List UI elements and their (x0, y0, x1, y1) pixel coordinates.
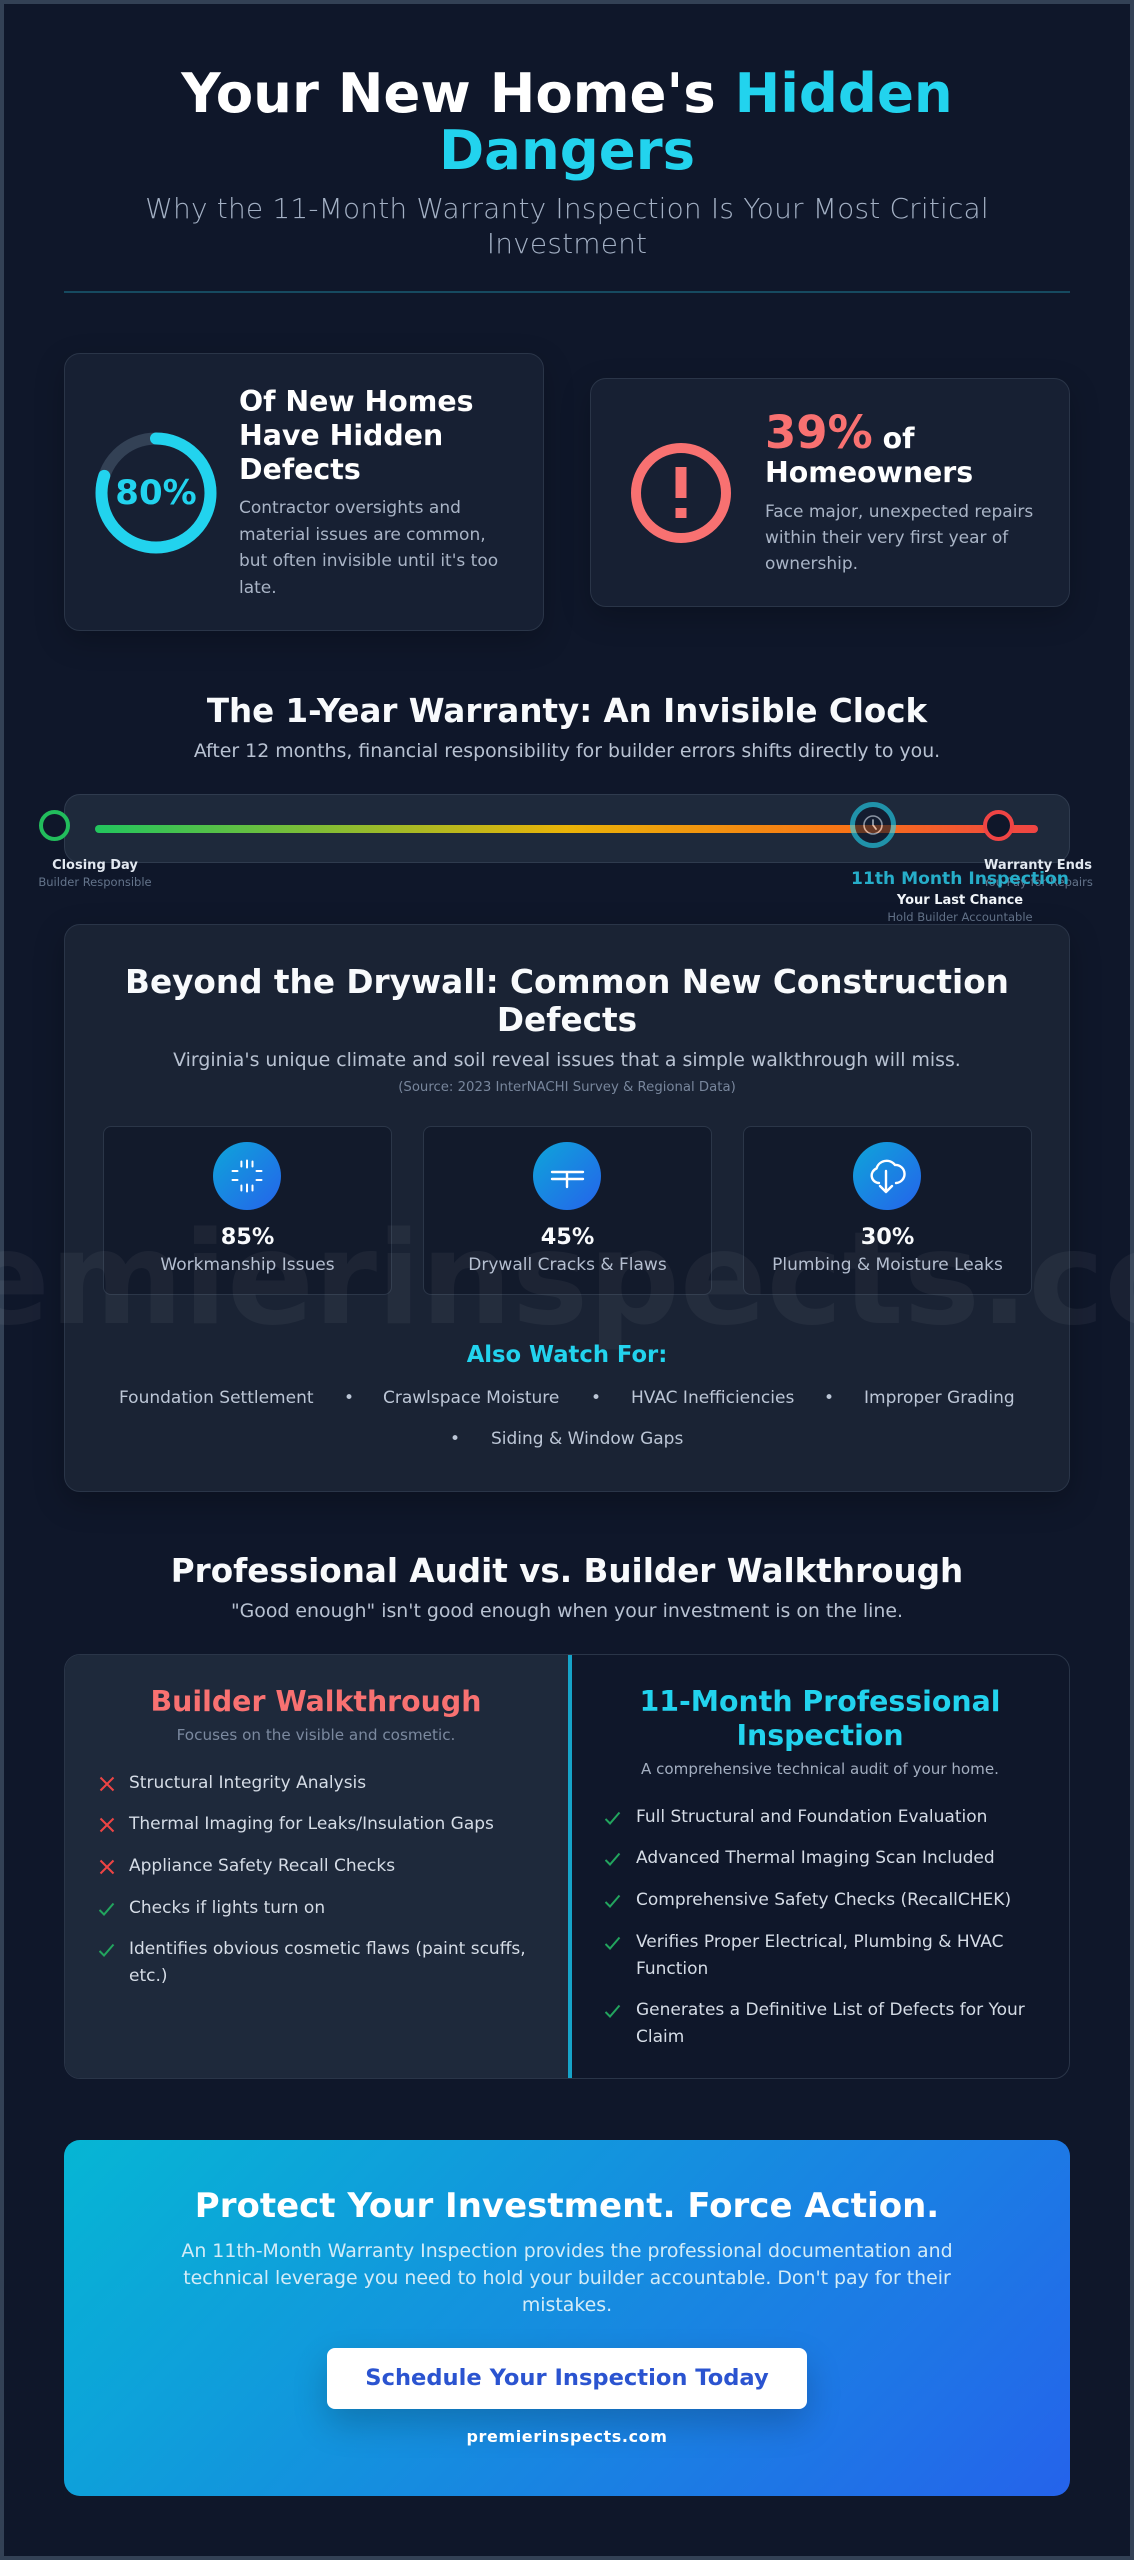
stat value: 45% (541, 1224, 594, 1250)
cta body (181, 2240, 953, 2316)
cta button: Schedule Your Inspection Today (365, 2365, 769, 2391)
panel: comparison (64, 1654, 1070, 2079)
label: 11th month inspection: Your Last Chance (897, 893, 1023, 908)
label: closing day (38, 858, 152, 889)
header (145, 61, 989, 260)
pro title: Inspection (736, 1719, 904, 1752)
also watch for list: HVAC Inefficiencies (631, 1388, 794, 1408)
timeline track panel (64, 794, 1070, 863)
pro title (640, 1685, 1000, 1752)
stat subheading: Homeowners (765, 456, 973, 489)
label: warranty ends: You Pay for Repairs (983, 875, 1093, 889)
card body: late. (239, 578, 277, 598)
title (180, 61, 953, 182)
stat body: Face major, unexpected repairs (765, 502, 1033, 522)
marker: 11th month (850, 802, 896, 848)
pro subtitle: A comprehensive technical audit of your home. (641, 1760, 999, 1778)
subtitle (145, 192, 989, 260)
stat heading: 39% of (765, 406, 914, 459)
also watch for list (119, 1388, 1015, 1449)
card heading (239, 385, 474, 486)
panel: 39 percent stat (590, 378, 1070, 607)
icon: warning circle (631, 443, 731, 543)
also watch for heading: Also Watch For: (467, 1342, 667, 1368)
label: 11th month inspection: Hold Builder Accountable (887, 910, 1033, 924)
label: warranty ends: Warranty Ends (984, 858, 1092, 873)
column background: builder (65, 1655, 568, 2080)
card heading: Defects (239, 453, 361, 486)
item: lights: Checks if lights turn on (129, 1898, 325, 1918)
item: appliance: Appliance Safety Recall Checks (129, 1856, 395, 1876)
panel: common defects (64, 924, 1070, 1492)
donut value: 80% (115, 473, 197, 513)
stat label: Workmanship Issues (160, 1255, 335, 1275)
pro title: 11-Month Professional (640, 1685, 1000, 1718)
item: systems function (605, 1932, 1003, 1979)
also watch for list: • (591, 1388, 601, 1408)
also watch for list: • (450, 1429, 460, 1449)
builder title: Builder Walkthrough (151, 1685, 481, 1718)
item: cosmetic (99, 1939, 526, 1986)
source note: (Source: 2023 InterNACHI Survey & Regional Data) (398, 1080, 736, 1095)
icon: drywall (533, 1142, 601, 1210)
panel: 80 percent stat (64, 353, 544, 631)
builder subtitle: Focuses on the visible and cosmetic. (177, 1726, 455, 1744)
section subheading: warranty clock: After 12 months, financial responsibility for builder errors shifts directly to you. (194, 740, 940, 762)
label: warranty ends (983, 858, 1093, 889)
label: 11th month inspection (851, 869, 1069, 924)
defects subheading: Virginia's unique climate and soil reveal issues that a simple walkthrough will miss. (173, 1049, 961, 1071)
stat card: plumbing (743, 1126, 1032, 1295)
item: thermal scan: Advanced Thermal Imaging Scan Included (636, 1848, 995, 1868)
gradient bar (95, 825, 1038, 833)
cta button (327, 2348, 807, 2409)
also watch for list: • (824, 1388, 834, 1408)
stat label: Plumbing & Moisture Leaks (772, 1255, 1003, 1275)
item: thermal: Thermal Imaging for Leaks/Insulation Gaps (129, 1814, 494, 1834)
card body: Contractor oversights and (239, 498, 461, 518)
item: systems function: Function (636, 1959, 708, 1979)
icon: workmanship (213, 1142, 281, 1210)
subtitle: Investment (487, 227, 647, 260)
item: safety checks: Comprehensive Safety Checks (RecallCHEK) (636, 1890, 1011, 1910)
marker: warranty ends (982, 810, 1014, 840)
also watch for list: Foundation Settlement (119, 1388, 314, 1408)
stat body: within their very first year of (765, 528, 1008, 548)
stat value: 30% (861, 1224, 914, 1250)
stat card: drywall (423, 1126, 712, 1295)
defects heading: Defects (497, 1000, 637, 1038)
cta body: An 11th-Month Warranty Inspection provides the professional documentation and (181, 2240, 953, 2262)
cta body: technical leverage you need to hold your builder accountable. Don't pay for their (183, 2267, 951, 2289)
item: defect list: Claim (636, 2027, 684, 2047)
section heading: comparison: Professional Audit vs. Builder Walkthrough (171, 1552, 963, 1590)
label: closing day: Builder Responsible (38, 875, 152, 889)
marker: closing day (38, 810, 70, 840)
item: defect list (605, 2000, 1025, 2047)
column divider (568, 1655, 572, 2080)
card heading: Have Hidden (239, 419, 443, 452)
column: professional inspection (605, 1685, 1025, 2047)
stat body (765, 502, 1033, 574)
label: closing day: Closing Day (52, 858, 138, 873)
subtitle: Why the 11-Month Warranty Inspection Is Your Most Critical (145, 192, 989, 225)
item: systems function: Verifies Proper Electrical, Plumbing & HVAC (636, 1932, 1003, 1952)
item: cosmetic: Identifies obvious cosmetic flaws (paint scuffs, (129, 1939, 526, 1959)
also watch for list: Improper Grading (864, 1388, 1015, 1408)
icon: cloud download (853, 1142, 921, 1210)
panel: call to action (64, 2140, 1070, 2496)
donut chart: 80% (96, 432, 216, 554)
stat card: workmanship (103, 1126, 392, 1295)
stat value: 85% (221, 1224, 274, 1250)
item: structural evaluation: Full Structural and Foundation Evaluation (636, 1807, 987, 1827)
card body: but often invisible until it's too (239, 551, 498, 571)
defects heading: Beyond the Drywall: Common New Construction (125, 963, 1009, 1001)
also watch for list: Siding & Window Gaps (491, 1429, 683, 1449)
section subheading: comparison: "Good enough" isn't good enough when your investment is on the line. (231, 1600, 903, 1622)
card body: material issues are common, (239, 525, 486, 545)
label: 11th month inspection: 11th Month Inspection (851, 869, 1069, 889)
defects heading (125, 963, 1009, 1038)
item: defect list: Generates a Definitive List of Defects for Your (636, 2000, 1025, 2020)
item: structural: Structural Integrity Analysis (129, 1773, 366, 1793)
column: builder walkthrough (99, 1685, 526, 1986)
cta heading: Protect Your Investment. Force Action. (195, 2186, 939, 2226)
stat label: Drywall Cracks & Flaws (468, 1255, 667, 1275)
card body (239, 498, 498, 598)
cta body: mistakes. (522, 2294, 612, 2316)
timeline (38, 794, 1093, 924)
website: premierinspects.com (466, 2427, 668, 2446)
section heading: warranty clock: The 1-Year Warranty: An Invisible Clock (207, 692, 927, 730)
also watch for list: Crawlspace Moisture (383, 1388, 559, 1408)
title: Your New Home's Hidden (181, 61, 953, 125)
title: Dangers (439, 118, 695, 182)
also watch for list: • (344, 1388, 354, 1408)
card heading: Of New Homes (239, 385, 474, 418)
item: cosmetic: etc.) (129, 1966, 168, 1986)
stat body: ownership. (765, 554, 858, 574)
